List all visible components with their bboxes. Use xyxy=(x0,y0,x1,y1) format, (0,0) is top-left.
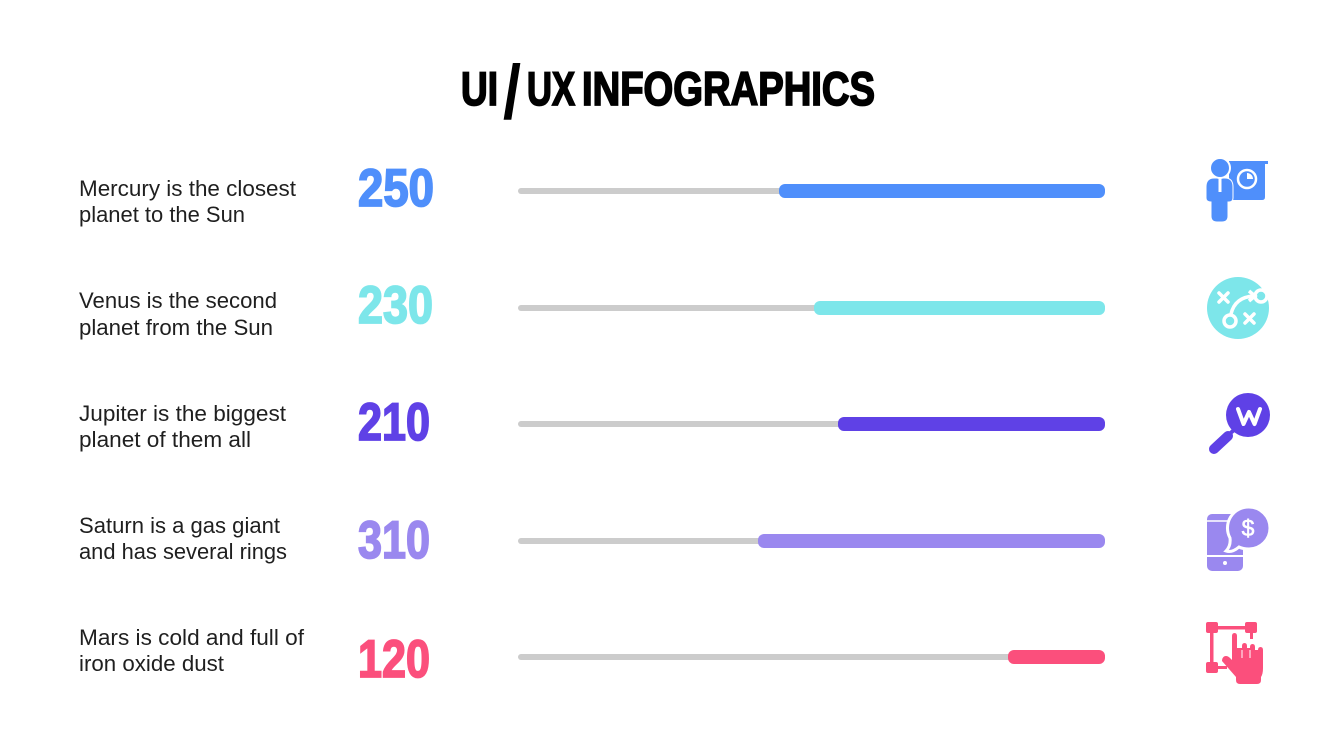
number: 310: 310 xyxy=(358,511,430,570)
row: Saturn xyxy=(79,507,1270,571)
text: Mercury description: planet to the Sun xyxy=(79,202,245,227)
text: Venus description: planet from the Sun xyxy=(79,315,273,340)
text: Venus description: Venus is the second xyxy=(79,288,277,313)
text: Mars description xyxy=(79,625,305,676)
icon: magnifier with W xyxy=(1214,393,1270,449)
title: INFOGRAPHICS xyxy=(582,62,875,115)
icon: hand selecting shape xyxy=(1206,622,1263,684)
text: Jupiter description: planet of them all xyxy=(79,427,251,452)
row: Venus xyxy=(79,276,1269,340)
icon: phone with dollar bubble: $ xyxy=(1242,515,1255,541)
text: Mars description: Mars is cold and full of xyxy=(79,625,305,650)
row: Mars xyxy=(79,622,1263,689)
text: Saturn description: and has several rings xyxy=(79,539,287,564)
text: Saturn description xyxy=(79,513,287,564)
text: Mercury description: Mercury is the closest xyxy=(79,176,296,201)
text: Jupiter description xyxy=(79,401,286,452)
title: UI xyxy=(461,62,498,115)
title: / xyxy=(503,50,521,135)
text: Saturn description: Saturn is a gas giant xyxy=(79,513,280,538)
icon: phone with dollar bubble xyxy=(1207,507,1270,571)
title: UX xyxy=(527,62,575,115)
number: 120: 120 xyxy=(358,630,430,689)
bar: Jupiter xyxy=(518,417,1105,431)
number: 230: 230 xyxy=(358,276,433,335)
text: Venus description xyxy=(79,288,277,340)
icon: presenter with chart xyxy=(1206,158,1268,222)
row: Jupiter xyxy=(79,393,1270,452)
text: Mars description: iron oxide dust xyxy=(79,651,224,676)
number: 210: 210 xyxy=(358,393,430,452)
title xyxy=(461,50,875,135)
icon: strategy play xyxy=(1207,277,1269,339)
row: Mercury xyxy=(79,158,1268,227)
bar: Mercury xyxy=(518,184,1105,198)
text: Jupiter description: Jupiter is the biggest xyxy=(79,401,286,426)
number: 250: 250 xyxy=(358,159,434,218)
bar: Venus xyxy=(518,301,1105,315)
bar: Saturn xyxy=(518,534,1105,548)
text: Mercury description xyxy=(79,176,296,227)
bar: Mars xyxy=(518,650,1105,664)
